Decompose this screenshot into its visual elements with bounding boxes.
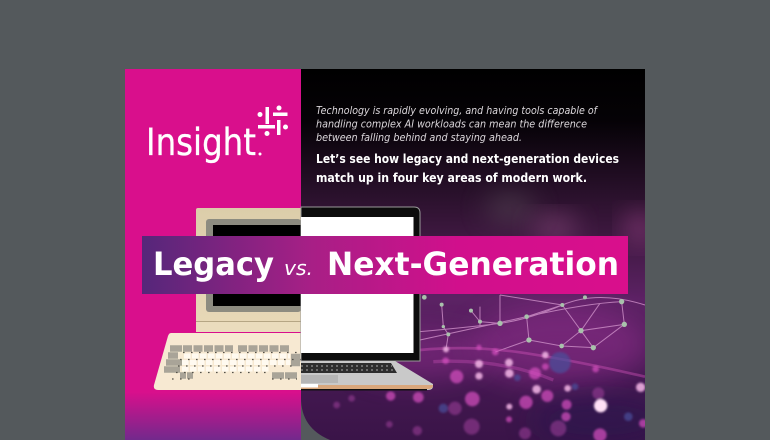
logo wordmark: Insight — [146, 121, 256, 164]
panel: magenta legacy side — [125, 69, 301, 440]
keyboard grey keys — [164, 348, 300, 376]
banner title: Legacy: Legacy — [153, 245, 274, 283]
keyboard white keys — [182, 356, 290, 369]
banner title: Next-Generation: Next-Generation — [327, 245, 619, 283]
illustration: legacy computer monitor — [196, 208, 301, 332]
illustration: legacy keyboard — [154, 333, 301, 390]
logo: Insight — [146, 106, 288, 164]
logo symbol — [258, 106, 288, 156]
panel: dark next-generation side with network backdrop — [301, 69, 670, 440]
text block: bold lead-in: Let’s see how legacy and next-generation devices — [316, 151, 619, 166]
banner: Legacy vs. Next-Generation — [142, 236, 628, 294]
text block: italic intro: between falling behind and staying ahead. — [316, 131, 522, 144]
text block: bold lead-in: match up in four key areas of modern work. — [316, 170, 587, 185]
banner title: vs.: vs. — [284, 256, 313, 280]
illustration: laptop — [301, 207, 433, 390]
keyboard key shadows — [172, 352, 301, 379]
infographic cover — [125, 69, 645, 440]
text block: italic intro: handling complex AI workloads can mean the difference — [316, 118, 587, 130]
text block: italic intro: Technology is rapidly evolving, and having tools capable of — [316, 104, 599, 117]
